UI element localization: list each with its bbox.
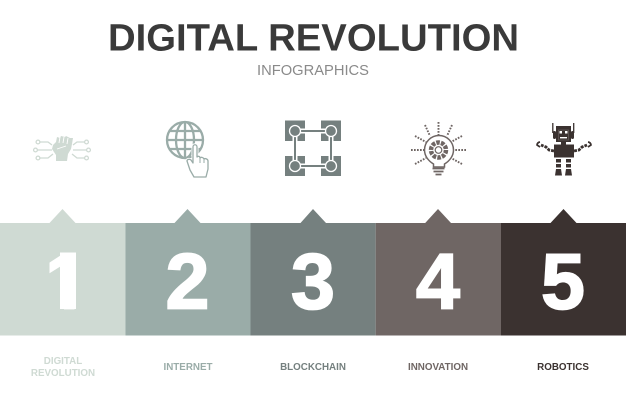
title: DIGITAL REVOLUTION (108, 17, 519, 60)
icon: fist with circuits (34, 136, 90, 161)
panel 4 (376, 209, 501, 336)
label: digital revolution: REVOLUTION (31, 368, 95, 379)
label: robotics: ROBOTICS (537, 362, 589, 373)
number 5: 5 (541, 236, 585, 326)
icon: blockchain squares (285, 120, 341, 176)
panel 2 (126, 209, 250, 336)
icon: robot (537, 123, 591, 176)
hand halo (187, 145, 208, 177)
panel 3 (250, 209, 376, 336)
label: blockchain: BLOCKCHAIN (280, 362, 346, 373)
number 2: 2 (166, 236, 209, 326)
icon: globe with pointing hand (167, 122, 208, 177)
number 4: 4 (416, 236, 460, 326)
number 1: 1 (45, 236, 89, 326)
panel 5 (501, 209, 626, 336)
label: innovation: INNOVATION (408, 362, 468, 373)
label: internet: INTERNET (164, 362, 213, 373)
subtitle: INFOGRAPHICS (257, 63, 369, 79)
icon: light bulb with gear (411, 122, 466, 174)
panel 1 (0, 209, 126, 336)
label: digital revolution: DIGITAL (44, 356, 82, 367)
number 3: 3 (291, 236, 335, 326)
